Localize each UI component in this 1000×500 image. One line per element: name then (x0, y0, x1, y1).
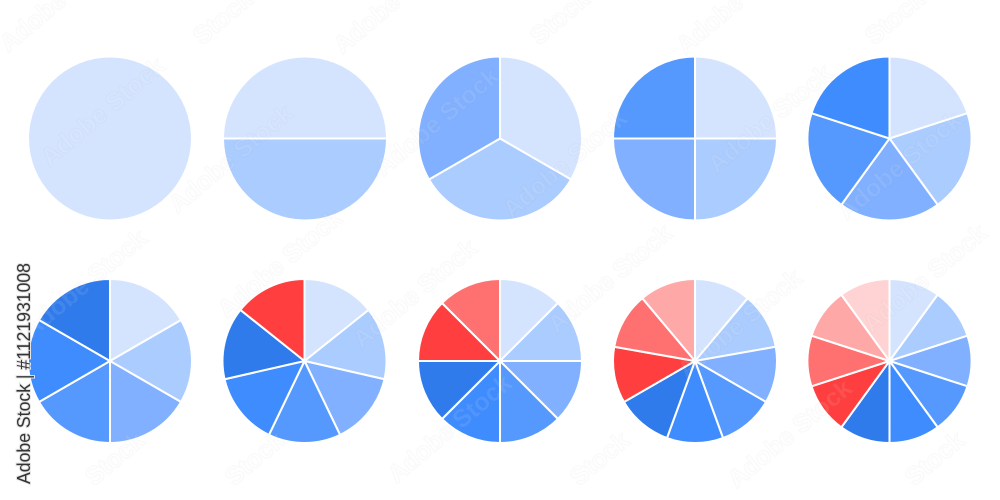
watermark: repeated diagonal Adobe Stock text: Adobe Stock (702, 59, 837, 179)
watermark: repeated diagonal Adobe Stock text: Adobe Stock (542, 219, 677, 339)
pie: 3 segments (418, 56, 582, 221)
pie: 2 segments (223, 56, 387, 221)
pie: 9 segments (613, 279, 777, 443)
watermark: repeated diagonal Adobe Stock text: Stock (565, 426, 635, 491)
watermark: repeated diagonal Adobe Stock text: Adobe Stock (497, 104, 632, 224)
pie: 10 segments (807, 279, 972, 443)
watermark: repeated diagonal Adobe Stock text: Stock (900, 426, 970, 491)
watermark: repeated diagonal Adobe Stock text: Adobe Stock (35, 52, 170, 172)
watermark: repeated diagonal Adobe Stock text: Adobe Stock (163, 99, 298, 219)
watermark: repeated diagonal Adobe Stock text: Stock (220, 426, 290, 491)
pie: 8 segments (418, 279, 582, 443)
watermark: repeated diagonal Adobe Stock text: Adobe Stock (382, 369, 517, 489)
watermark: repeated diagonal Adobe Stock text: Stock (80, 426, 150, 491)
pie: 5 segments (807, 56, 972, 221)
pie: 7 segments (222, 279, 387, 443)
watermark: repeated diagonal Adobe Stock text: Adobe Stock (722, 374, 857, 494)
watermark: repeated diagonal Adobe Stock text: Adobe Stock (672, 264, 807, 384)
watermark: repeated diagonal Adobe Stock text: Adobe Stock (17, 224, 152, 344)
watermark: repeated diagonal Adobe Stock text: Adobe Stock (832, 106, 967, 226)
stock id label: Adobe Stock | #1121931008 (14, 263, 34, 484)
watermark: repeated diagonal Adobe Stock text: Adobe Stock (212, 204, 347, 324)
watermark: repeated diagonal Adobe Stock text: Adobe Stock (347, 234, 482, 354)
pie: 1 segment (29, 58, 191, 220)
watermark: repeated diagonal Adobe Stock text: Adobe Stock (857, 219, 992, 339)
pie: 6 segments (28, 279, 192, 443)
watermark: repeated diagonal Adobe Stock text: Adobe Stock (369, 62, 504, 182)
pie: 4 segments (613, 56, 777, 221)
